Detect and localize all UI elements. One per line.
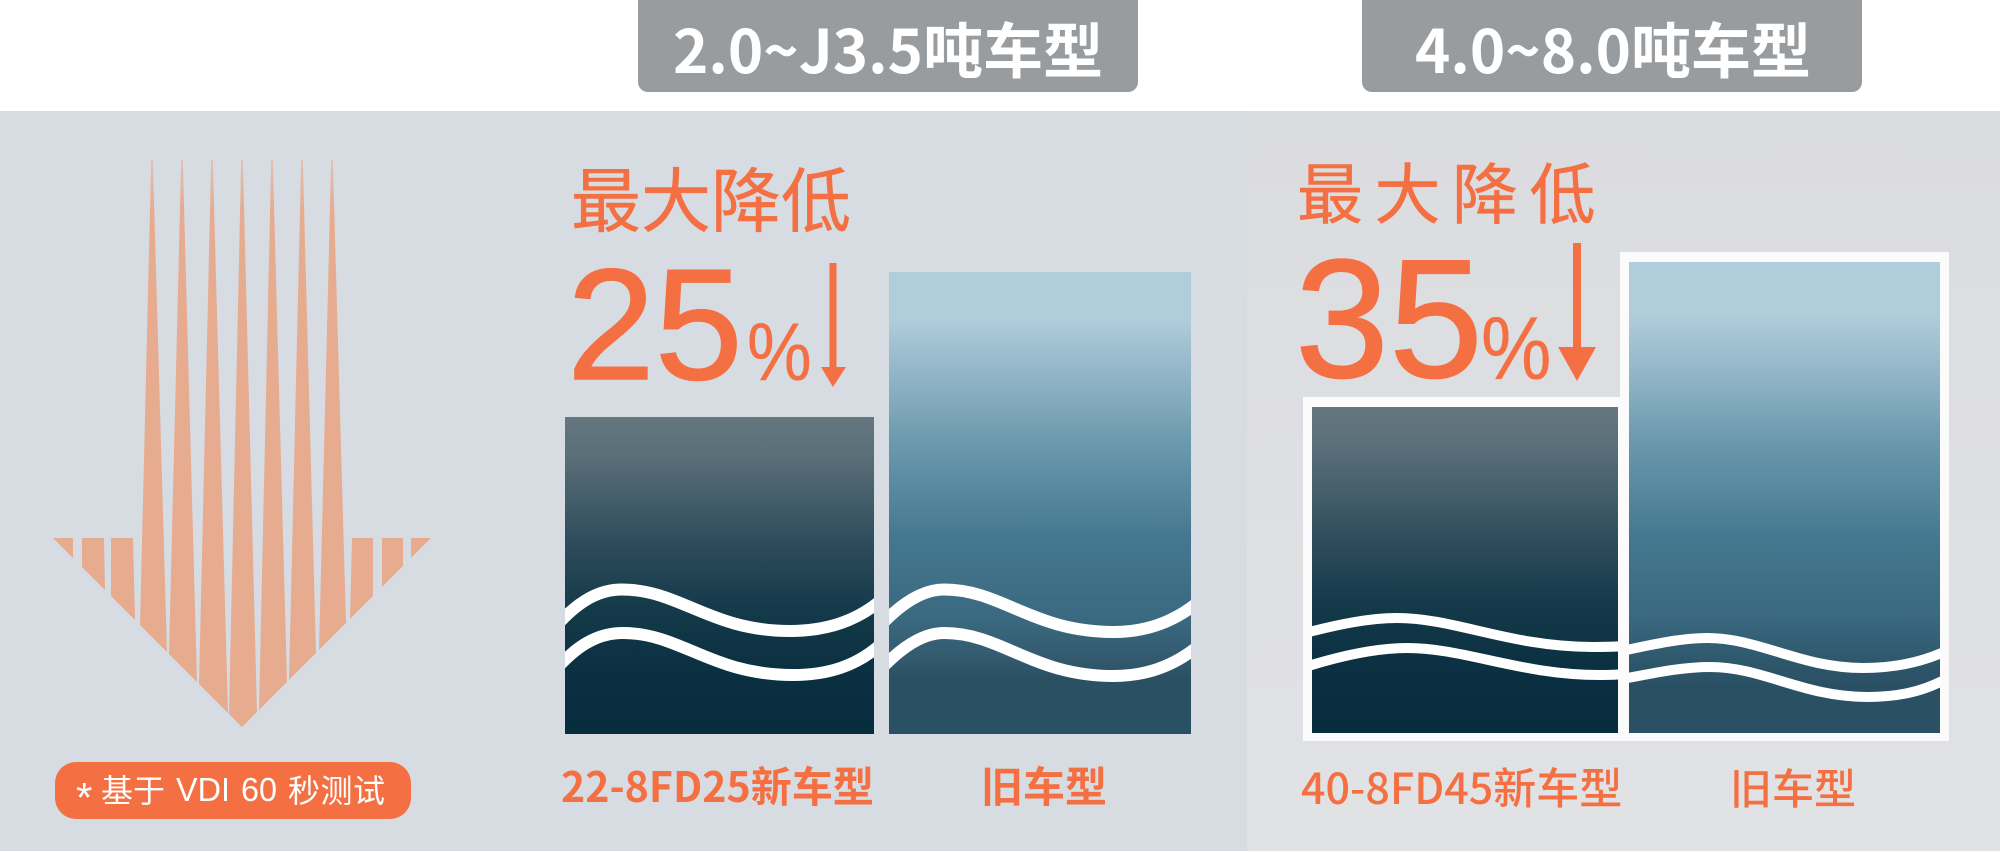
- panel: right background: [1247, 111, 2000, 851]
- callout: test basis note: 秒测试: [288, 766, 385, 812]
- heading: 2.0~J3.5 ton models: 2.0~J3.5吨车型: [673, 4, 1103, 91]
- arrow: down left: [821, 263, 846, 387]
- label: right panel old model: 旧车型: [1730, 756, 1856, 817]
- heading: 4.0~8.0 ton models: 4.0~8.0吨车型: [1415, 4, 1811, 91]
- text: max reduction left: 最大降低: [571, 146, 851, 247]
- label: 22-8FD25 new model: 22-8FD25新车型: [561, 754, 874, 815]
- arrow: down right: [1558, 243, 1596, 381]
- number: 25 percent: %: [747, 307, 812, 398]
- icon: striped down arrow: [53, 160, 431, 727]
- bar: 40-8FD45 new model with white frame: [1303, 397, 1629, 741]
- number: 35 percent: %: [1481, 299, 1551, 398]
- panel: left background: [0, 111, 1247, 851]
- text: max reduction right: 最大降低: [1297, 142, 1607, 238]
- number: 35 percent: 35: [1295, 224, 1483, 413]
- bar: right panel old model with white frame: [1620, 252, 1949, 741]
- callout: test basis note: [55, 762, 411, 821]
- callout: test basis note: VDI: [176, 771, 230, 808]
- callout: test basis note: 基于: [101, 766, 165, 812]
- number: 25 percent: 25: [567, 237, 743, 413]
- bar: left panel old model: [882, 272, 1197, 734]
- callout: test basis note: 60: [241, 771, 277, 808]
- label: 40-8FD45 new model: 40-8FD45新车型: [1301, 755, 1622, 817]
- label: left panel old model: 旧车型: [981, 754, 1107, 815]
- bar: 22-8FD25 new model: [558, 417, 880, 734]
- callout: test basis note: *: [76, 774, 92, 821]
